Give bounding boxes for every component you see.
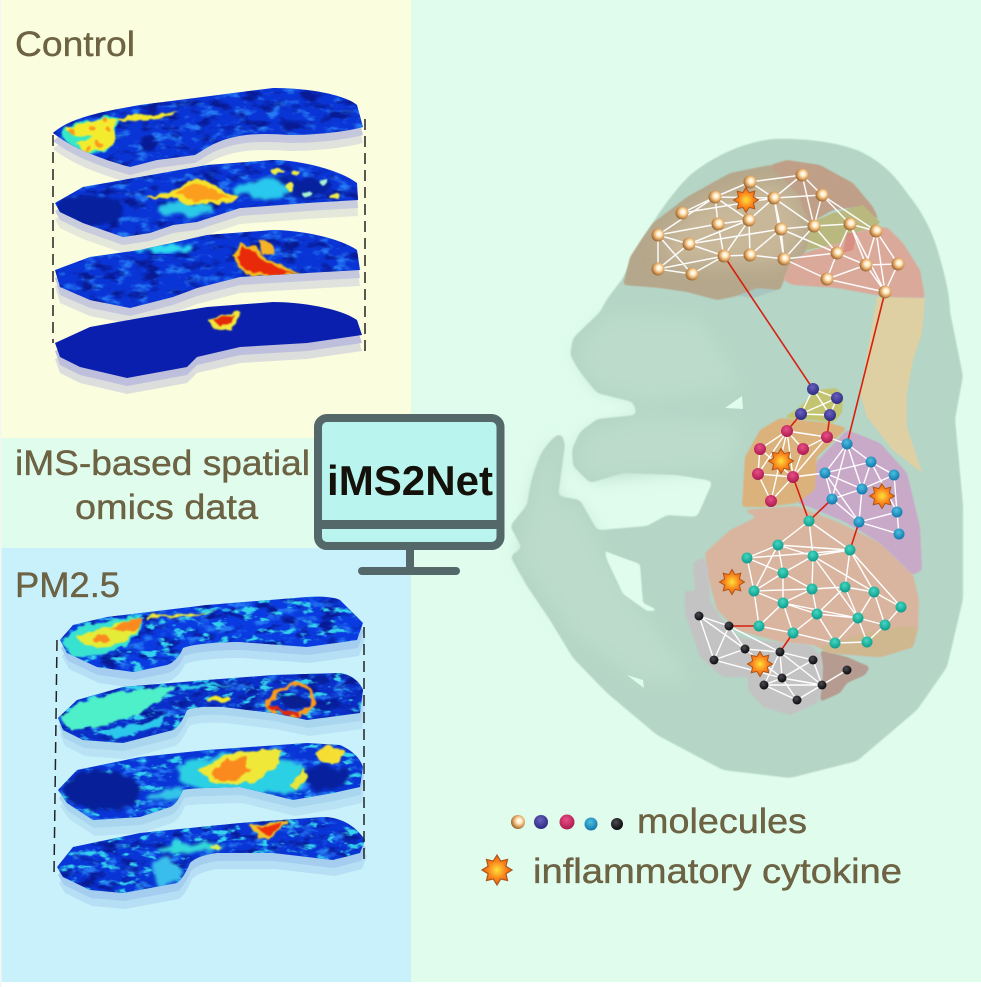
organ: forebrain <box>623 165 813 300</box>
slice 4 <box>55 814 367 909</box>
slice 1 <box>50 85 366 183</box>
slice 3 <box>50 228 366 324</box>
organ: heart <box>797 430 922 575</box>
organ: thyroid <box>783 388 843 423</box>
organ: hindbrain <box>783 227 925 298</box>
organ: olive brain region <box>807 205 880 250</box>
legend: molecules <box>511 802 807 841</box>
nodes: brain molecules <box>652 168 904 298</box>
text: iMS-based spatial omics data <box>15 444 310 527</box>
nodes: thyroid molecules <box>795 383 843 421</box>
network: long-range red links <box>724 256 885 652</box>
nodes: lung molecules <box>752 425 833 507</box>
panel: control spatial omics stack <box>50 85 366 394</box>
legend: molecules: molecules <box>637 802 807 841</box>
text: iMS-based spatial omics data: iMS-based spatial <box>15 444 310 483</box>
organ: lung <box>742 418 847 507</box>
slice 1 <box>55 594 367 688</box>
fetus and molecular network <box>510 139 963 778</box>
text: iMS-based spatial omics data: omics data <box>75 488 259 527</box>
organ: lower tan band <box>818 626 918 657</box>
organ: intestine <box>685 557 823 715</box>
icons: inflammatory cytokine stars <box>720 188 894 676</box>
nodes: liver molecules <box>742 516 906 648</box>
panel: PM2.5 spatial omics stack <box>54 594 367 909</box>
slice 2 <box>50 158 366 253</box>
slice 4 <box>55 302 362 394</box>
organ: spinal cord <box>860 297 925 473</box>
dashed guide lines <box>53 119 365 353</box>
network: brain edges <box>658 175 898 292</box>
icon: computer monitor with iMS2Net label: iMS2Net <box>327 457 493 504</box>
legend: inflammatory cytokine: inflammatory cytokine <box>533 852 902 891</box>
organ: red brain spot <box>843 233 857 253</box>
icon: computer monitor with iMS2Net label <box>318 418 500 575</box>
panel: control heading: Control <box>15 25 135 64</box>
slice 2 <box>55 670 367 759</box>
organ: liver <box>705 506 919 657</box>
slice 3 <box>55 740 367 836</box>
network: thorax edges <box>758 389 899 534</box>
organ: forebrain highlight <box>660 180 805 265</box>
network: abdomen edges <box>699 521 901 700</box>
panel: PM2.5 heading: PM2.5 <box>15 566 120 605</box>
organ: maroon region <box>820 650 870 702</box>
organ: midbrain <box>732 275 783 298</box>
fetus silhouette <box>510 139 963 778</box>
organ: top brain region <box>770 160 880 223</box>
dashed guide lines <box>54 627 364 875</box>
nodes: intestine molecules <box>694 612 852 704</box>
nodes: heart molecules <box>820 438 904 540</box>
